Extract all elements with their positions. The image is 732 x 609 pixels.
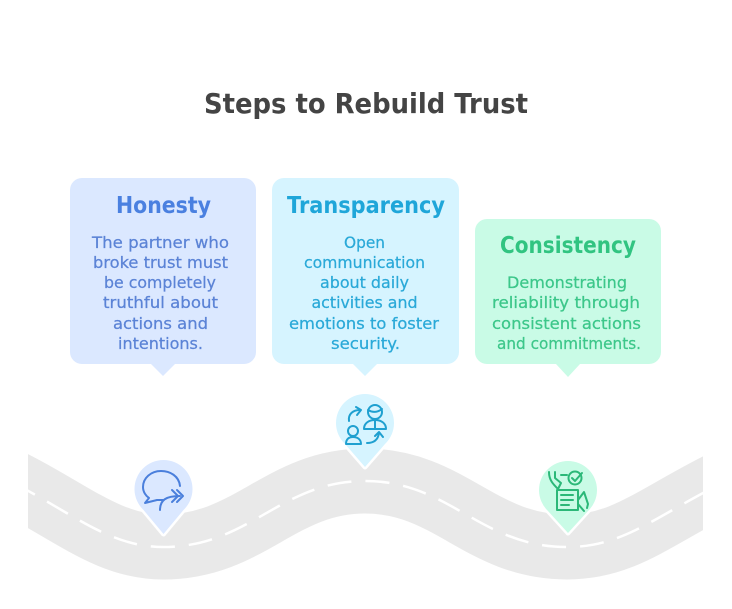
- text: transparency description: about daily: [320, 273, 409, 292]
- text: consistency description: [492, 273, 641, 353]
- pin: transparency: [336, 394, 394, 467]
- panel: transparency: [272, 178, 459, 376]
- pin shape: transparency: [336, 394, 394, 467]
- heading: consistency: Consistency: [500, 233, 636, 259]
- text: transparency description: communication: [304, 253, 425, 272]
- text: honesty description: be completely: [104, 273, 216, 292]
- text: honesty description: truthful about: [103, 293, 218, 312]
- pin: honesty: [134, 460, 192, 534]
- heading: transparency: Transparency: [287, 193, 445, 219]
- text: honesty description: The partner who: [91, 233, 229, 252]
- card background: honesty: [70, 178, 256, 376]
- text: transparency description: emotions to foster: [289, 314, 439, 333]
- card background: consistency: [475, 219, 661, 377]
- panel: consistency: [475, 219, 661, 377]
- road: [0, 468, 732, 547]
- panel: honesty: [70, 178, 256, 376]
- text: consistency description: consistent actions: [492, 314, 641, 333]
- text: transparency description: security.: [331, 334, 400, 353]
- text: honesty description: broke trust must: [93, 253, 228, 272]
- text: honesty description: [91, 233, 229, 353]
- text: consistency description: and commitments.: [497, 334, 641, 353]
- text: consistency description: reliability through: [492, 293, 640, 312]
- text: consistency description: Demonstrating: [507, 273, 627, 292]
- title: Steps to Rebuild Trust: [204, 87, 528, 120]
- pin shape: honesty: [134, 460, 192, 534]
- pin: consistency: [539, 461, 597, 533]
- heading: honesty: Honesty: [116, 193, 211, 219]
- text: transparency description: [289, 233, 439, 353]
- text: transparency description: activities and: [312, 293, 418, 312]
- icon: speech bubble with arrow: [143, 471, 183, 510]
- pin shape: consistency: [539, 461, 597, 533]
- text: honesty description: intentions.: [118, 334, 203, 353]
- icon: document with check and hands: [549, 472, 588, 511]
- text: transparency description: Open: [344, 233, 385, 252]
- icon: two people exchanging: [346, 405, 386, 444]
- text: honesty description: actions and: [113, 314, 208, 333]
- card background: transparency: [272, 178, 459, 376]
